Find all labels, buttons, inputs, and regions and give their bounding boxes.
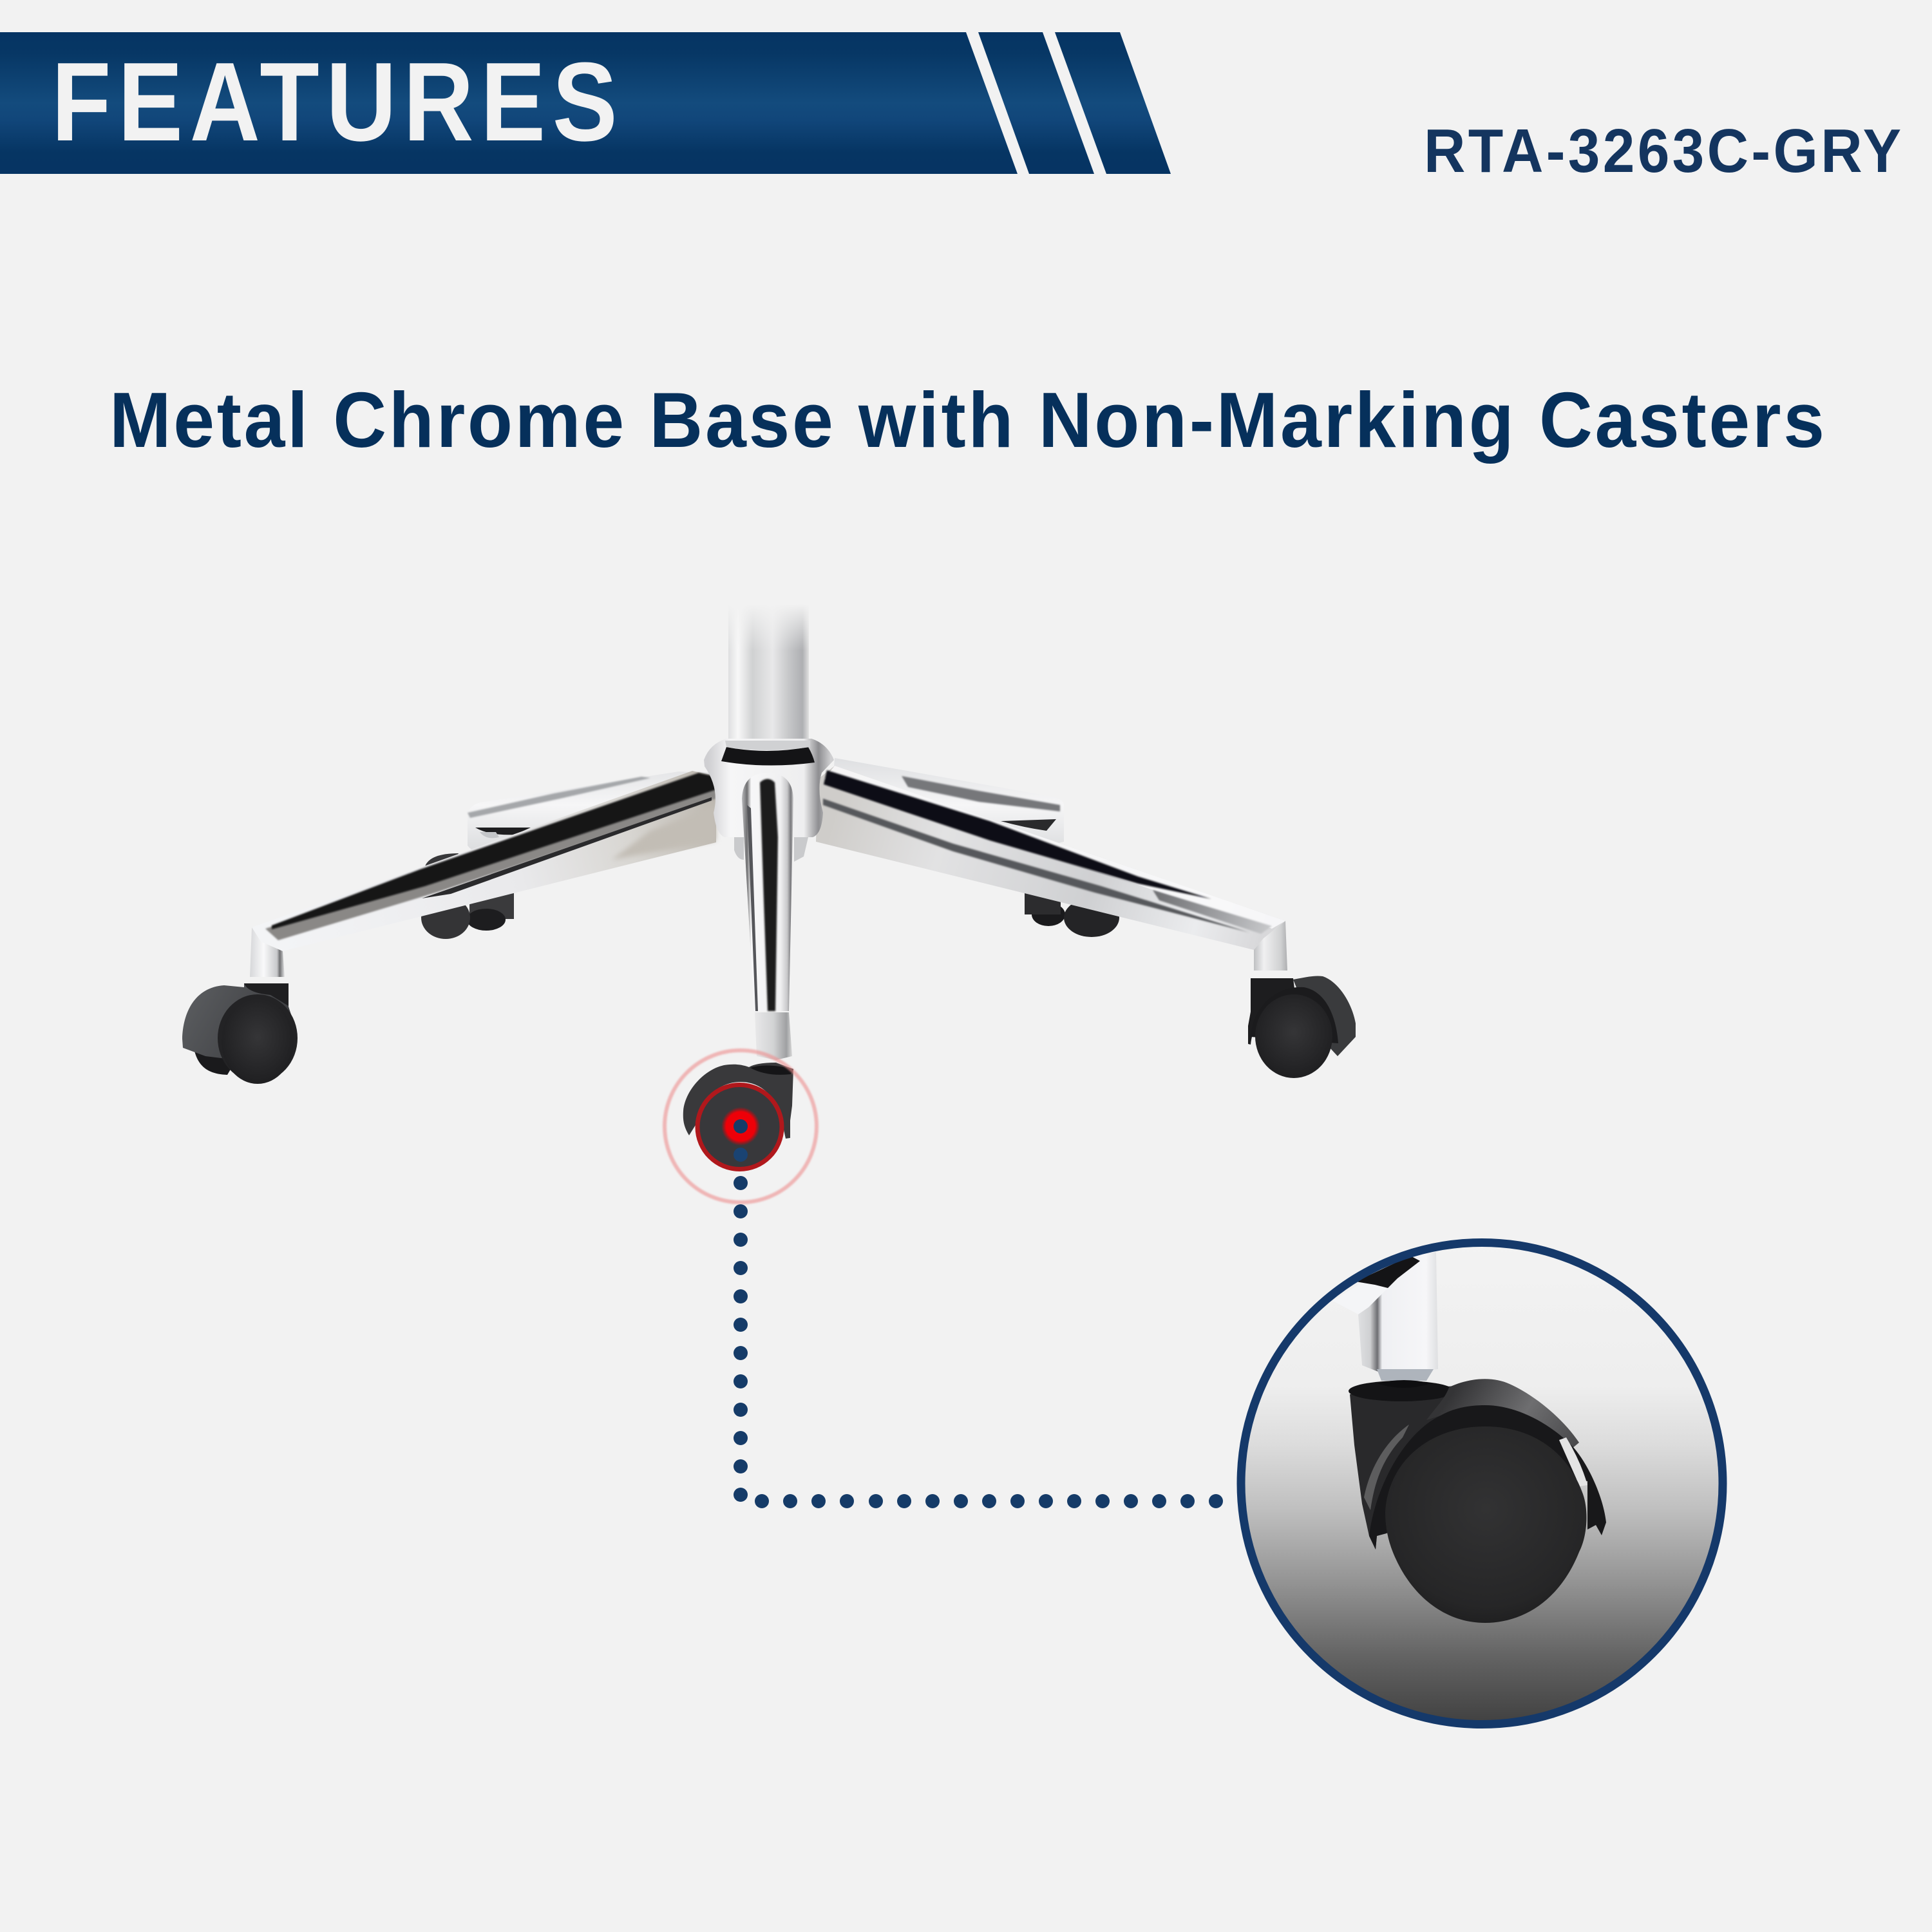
heading: FEATURES: FEATURES — [52, 39, 618, 164]
hub — [704, 739, 834, 862]
right arm — [816, 766, 1285, 950]
slot — [1559, 1437, 1587, 1486]
fork socket — [1350, 1386, 1452, 1549]
right caster — [1248, 976, 1356, 1078]
feature title: Metal Chrome Base with Non-Marking Casters — [109, 377, 1824, 464]
back caster left — [421, 853, 514, 939]
left arm — [252, 771, 716, 951]
right leg — [1254, 921, 1287, 971]
chair base photo illustration — [182, 603, 1356, 1171]
chrome stem — [1358, 1252, 1438, 1372]
header banner — [0, 32, 1171, 174]
callout ring — [1241, 1243, 1723, 1725]
magnified caster — [1332, 1252, 1606, 1623]
dotted leader line — [734, 1119, 1223, 1508]
front socket — [755, 1012, 792, 1060]
left caster — [182, 983, 298, 1084]
center column — [724, 603, 813, 749]
wheel — [1385, 1426, 1587, 1623]
fork lip — [1369, 1405, 1606, 1549]
model number: RTA-3263C-GRY — [1424, 116, 1901, 185]
highlight ring — [665, 1050, 817, 1202]
fork hood — [1426, 1379, 1579, 1449]
magnified caster callout — [1241, 1243, 1723, 1725]
back caster right — [1025, 889, 1119, 937]
front arm — [742, 773, 793, 1011]
highlighted front caster — [683, 1063, 793, 1171]
back arm plates — [468, 758, 1064, 857]
left leg — [250, 927, 285, 977]
